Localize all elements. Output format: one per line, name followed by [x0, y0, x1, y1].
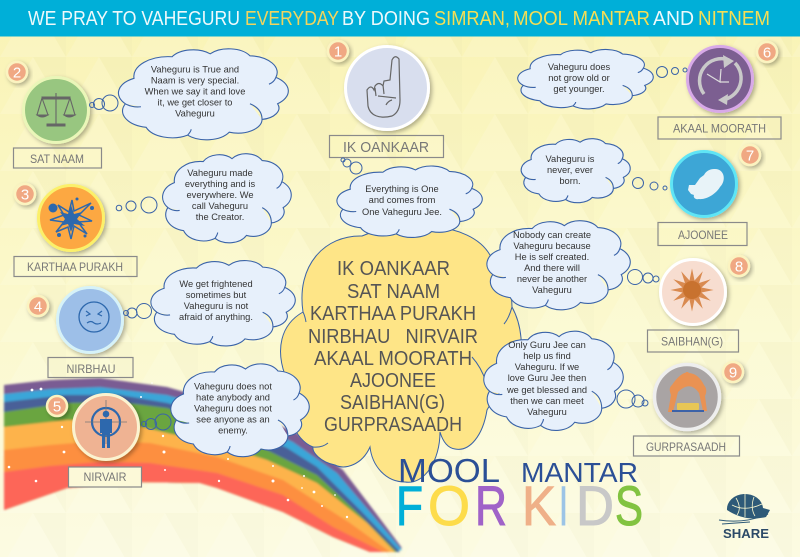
panel 9: gurprasaadh: [484, 331, 743, 456]
number badge: [15, 184, 35, 204]
panel 2: sat naam: [7, 49, 288, 168]
speech cloud: Only Guru Jee can: [508, 340, 586, 350]
header band: [0, 0, 800, 36]
speech cloud: never, ever: [547, 165, 593, 175]
speech cloud: afraid of anything.: [179, 312, 253, 322]
number badge: 2: [13, 64, 21, 82]
panel 3: karthaa purakh: [14, 154, 291, 276]
label: [14, 256, 137, 276]
panel 6: akaal moorath: [518, 42, 781, 139]
title: mool mantar for kids: R: [475, 474, 507, 537]
speech cloud: Naam is very special.: [151, 76, 239, 86]
number badge: [7, 62, 27, 82]
speech cloud: Vaheguru: [527, 407, 567, 417]
title: mool mantar for kids: MOOL: [398, 452, 500, 489]
icon: target person: [74, 394, 138, 460]
speech cloud: [118, 49, 288, 140]
central list: [308, 258, 478, 436]
heading: EVERYDAY: [245, 8, 339, 30]
bubbles: [90, 95, 118, 111]
icon: burst: [38, 186, 104, 250]
title: mool mantar for kids: K: [522, 474, 556, 537]
heading: AND: [653, 8, 694, 30]
central list: SAIBHAN(G): [340, 392, 445, 414]
speech cloud: Vaheguru does not: [194, 382, 272, 392]
heading: WE PRAY TO VAHEGURU: [28, 8, 240, 30]
central list: IK OANKAAR: [337, 258, 450, 280]
speech cloud: Vaheguru because: [513, 241, 591, 251]
label: SAIBHAN(G): [661, 334, 723, 348]
central list: AJOONEE: [350, 370, 436, 392]
icon: scales: [24, 78, 88, 142]
speech cloud: Vaheguru does not: [194, 404, 272, 414]
speech cloud: Vaheguru: [175, 108, 215, 118]
label: KARTHAA PURAKH: [27, 260, 123, 274]
speech cloud: Vaheguru. If we: [515, 362, 579, 372]
number badge: [723, 362, 743, 382]
speech cloud: [171, 364, 309, 457]
title: mool mantar for kids: F: [396, 474, 423, 537]
speech cloud: see anyone as an: [196, 414, 270, 424]
speech cloud: He is self created.: [515, 252, 589, 262]
icon: worried face: [58, 288, 122, 352]
logo: share: [719, 494, 770, 541]
icon: fetus: [672, 152, 736, 216]
speech cloud: And there will: [524, 263, 580, 273]
title: mool mantar for kids: D: [576, 474, 614, 537]
speech cloud: everywhere. We: [186, 190, 254, 200]
central list: AKAAL MOORATH: [314, 348, 472, 370]
title: mool mantar for kids: S: [615, 474, 643, 537]
label: AKAAL MOORATH: [673, 122, 766, 136]
label: [48, 358, 133, 378]
number badge: [729, 256, 749, 276]
bubbles: [142, 414, 171, 430]
icon: clock: [688, 46, 752, 112]
label: NIRBHAU: [66, 362, 116, 376]
speech cloud: Vaheguru is True and: [151, 64, 239, 74]
speech cloud: hate anybody and: [196, 392, 270, 402]
label: IK OANKAAR: [343, 140, 429, 156]
icon: sun: [660, 260, 726, 324]
speech cloud: Vaheguru does: [548, 62, 611, 72]
speech cloud: everything is one: Everything is One: [365, 184, 439, 194]
speech cloud: We get frightened: [179, 279, 253, 289]
label: [658, 117, 781, 139]
number badge: 4: [34, 298, 42, 316]
speech cloud: Vaheguru is: [546, 154, 595, 164]
heading: [28, 8, 770, 30]
label: SAT NAAM: [30, 152, 84, 166]
speech cloud: enemy.: [218, 426, 248, 436]
title: mool mantar for kids: [396, 452, 643, 537]
label: [14, 148, 102, 168]
rainbow: [4, 378, 402, 552]
speech cloud: born.: [559, 176, 581, 186]
title: mool mantar for kids: I: [559, 474, 568, 537]
heading: SIMRAN,: [434, 8, 510, 30]
speech cloud: the Creator.: [196, 212, 244, 222]
speech cloud: everything and is: [185, 179, 255, 189]
heading: MOOL MANTAR: [513, 8, 650, 30]
speech cloud: [163, 154, 291, 243]
speech cloud: then we can meet: [510, 396, 584, 406]
speech cloud: it, we get closer to: [158, 98, 232, 108]
central list: SAT NAAM: [347, 281, 440, 303]
speech cloud: [484, 331, 623, 430]
number badge: [28, 296, 48, 316]
title: mool mantar for kids: MANTAR: [521, 457, 638, 488]
speech cloud: help us find: [523, 351, 571, 361]
speech cloud: not grow old or: [548, 73, 610, 83]
bubbles: [632, 178, 667, 190]
heading: BY DOING: [342, 8, 430, 30]
label: GURPRASAADH: [646, 440, 726, 454]
speech cloud: When we say it and love: [145, 86, 245, 96]
bubbles: [124, 304, 152, 318]
speech cloud: Vaheguru: [532, 285, 572, 295]
number badge: 8: [735, 258, 743, 276]
logo: share: SHARE: [723, 527, 769, 541]
speech cloud: get younger.: [553, 84, 605, 94]
speech cloud: everything is one: and comes from: [369, 195, 436, 205]
panel 7: ajoonee: [521, 139, 760, 246]
speech cloud: we get blessed and: [506, 385, 587, 395]
speech cloud: Vaheguru is not: [184, 301, 249, 311]
panel 8: saibhan(g): [487, 221, 749, 352]
speech cloud: [151, 261, 295, 346]
heading: NITNEM: [698, 8, 770, 30]
central list: GURPRASAADH: [324, 414, 462, 436]
number badge: [47, 396, 67, 416]
bubbles: [628, 270, 659, 284]
speech cloud: [487, 221, 630, 310]
central cloud: [281, 226, 521, 482]
speech cloud: Vaheguru made: [187, 168, 253, 178]
central list: NIRBHAU NIRVAIR: [308, 326, 478, 348]
panel 4: nirbhau: [28, 261, 295, 378]
number badge: 5: [53, 398, 61, 416]
speech cloud: [521, 139, 630, 203]
label: NIRVAIR: [84, 470, 127, 484]
speech cloud: everything is one: [337, 158, 482, 237]
number badge: 9: [729, 364, 737, 382]
central list: KARTHAA PURAKH: [310, 303, 476, 325]
speech cloud: never be another: [517, 274, 587, 284]
icon: pointing hand: [346, 46, 428, 130]
bubbles: [116, 197, 157, 213]
speech cloud: [518, 49, 653, 109]
label: [634, 436, 740, 456]
number badge: [757, 42, 777, 62]
label: [658, 222, 747, 246]
speech cloud: sometimes but: [186, 290, 247, 300]
speech cloud: everything is one: One Vaheguru Jee.: [362, 207, 442, 217]
panel 1: ik oankaar: [328, 41, 444, 158]
number badge: 6: [763, 44, 771, 62]
label: [648, 330, 738, 352]
title: mool mantar for kids: O: [428, 474, 470, 537]
panel 5: nirvair: [47, 364, 309, 487]
number badge: 1: [334, 44, 342, 60]
number badge: 3: [21, 186, 29, 204]
number badge: 7: [746, 148, 754, 164]
label: AJOONEE: [678, 228, 728, 242]
bubbles: [656, 66, 687, 78]
speech cloud: call Vaheguru: [192, 201, 248, 211]
icon: canopy: [654, 364, 720, 430]
label: [68, 467, 142, 487]
bubbles: [617, 390, 648, 408]
speech cloud: love Guru Jee then: [508, 373, 586, 383]
number badge: [740, 145, 760, 165]
speech cloud: Nobody can create: [513, 230, 591, 240]
